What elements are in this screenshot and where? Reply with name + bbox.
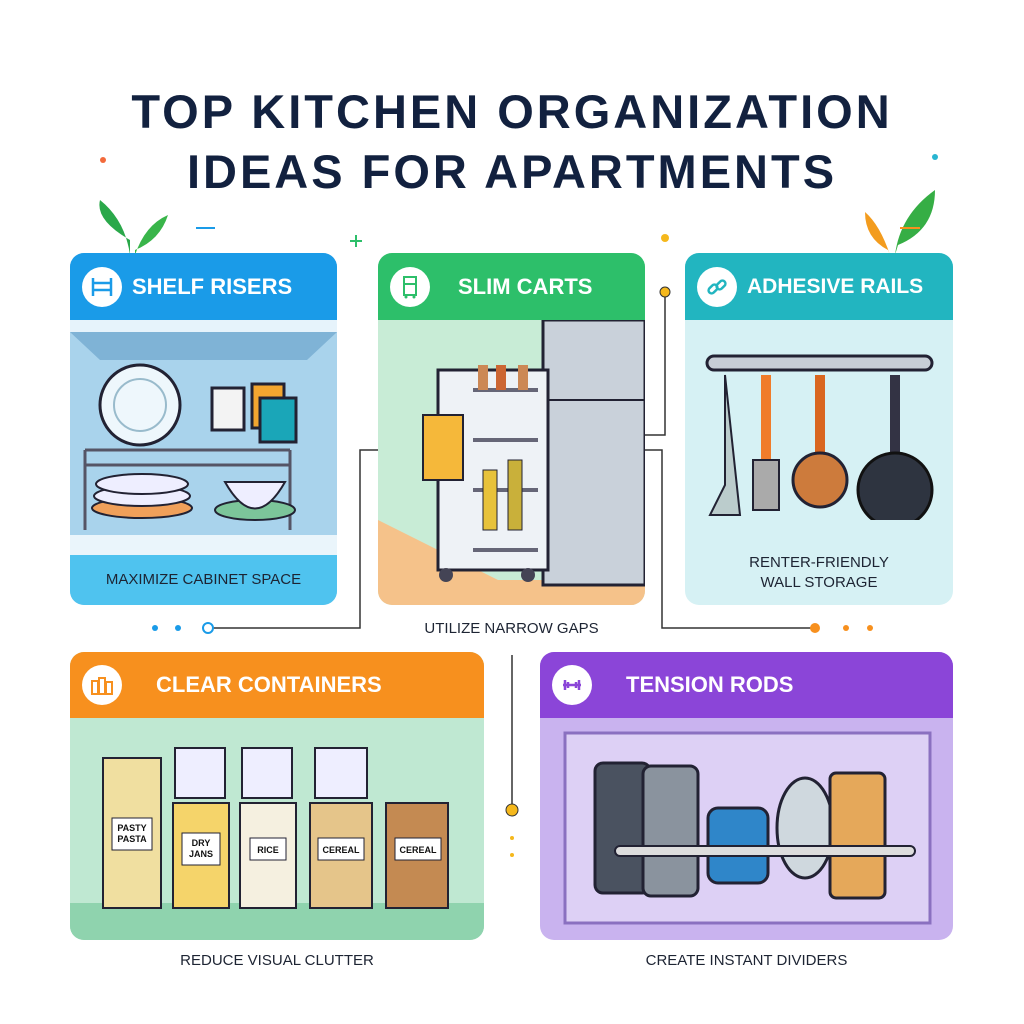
header: tension rods: TENSION RODS xyxy=(626,672,793,697)
header: clear containers: CLEAR CONTAINERS xyxy=(156,672,382,697)
caption: renter-friendly wall storage xyxy=(749,554,889,591)
illustration: labeled jars xyxy=(70,718,484,940)
illustration: labeled jars: CEREAL xyxy=(399,845,437,855)
title xyxy=(131,85,893,198)
header: shelf risers xyxy=(70,253,337,320)
panel: tension rods xyxy=(540,652,953,940)
caption: reduce visual clutter: REDUCE VISUAL CLUTTER xyxy=(180,952,374,969)
header: slim carts xyxy=(378,253,645,320)
illustration: plates and cups on riser xyxy=(70,320,337,555)
caption: maximize cabinet space xyxy=(70,555,337,605)
title: IDEAS FOR APARTMENTS xyxy=(187,145,837,198)
header: tension rods xyxy=(540,652,953,718)
illustration: labeled jars: CEREAL xyxy=(322,845,360,855)
illustration: labeled jars: DRY xyxy=(192,838,210,848)
panel: slim carts xyxy=(378,253,645,605)
illustration: pans divided by rod xyxy=(564,732,932,924)
caption: renter-friendly wall storage: RENTER-FRIENDLY xyxy=(749,554,889,571)
illustration: cart beside fridge xyxy=(378,320,645,605)
illustration: labeled jars: PASTY xyxy=(117,823,147,833)
title: TOP KITCHEN ORGANIZATION xyxy=(131,85,893,138)
caption: utilize narrow gaps: UTILIZE NARROW GAPS xyxy=(424,620,599,637)
header: shelf risers: SHELF RISERS xyxy=(132,274,292,298)
caption: create instant dividers: CREATE INSTANT DIVIDERS xyxy=(646,952,847,969)
header: slim carts: SLIM CARTS xyxy=(458,274,592,298)
panel: clear containers xyxy=(70,652,484,940)
panel: adhesive rails xyxy=(685,253,953,605)
illustration: labeled jars: RICE xyxy=(257,845,279,855)
illustration: labeled jars: PASTA xyxy=(117,834,147,844)
header: adhesive rails xyxy=(685,253,953,320)
illustration: utensils on rail xyxy=(706,354,934,520)
caption: renter-friendly wall storage: WALL STORAGE xyxy=(760,574,877,591)
header: adhesive rails: ADHESIVE RAILS xyxy=(747,274,923,298)
illustration: labeled jars: JANS xyxy=(189,849,213,859)
caption: maximize cabinet space: MAXIMIZE CABINET SPACE xyxy=(106,571,301,588)
panel: shelf risers xyxy=(70,253,337,605)
header: clear containers xyxy=(70,652,484,718)
